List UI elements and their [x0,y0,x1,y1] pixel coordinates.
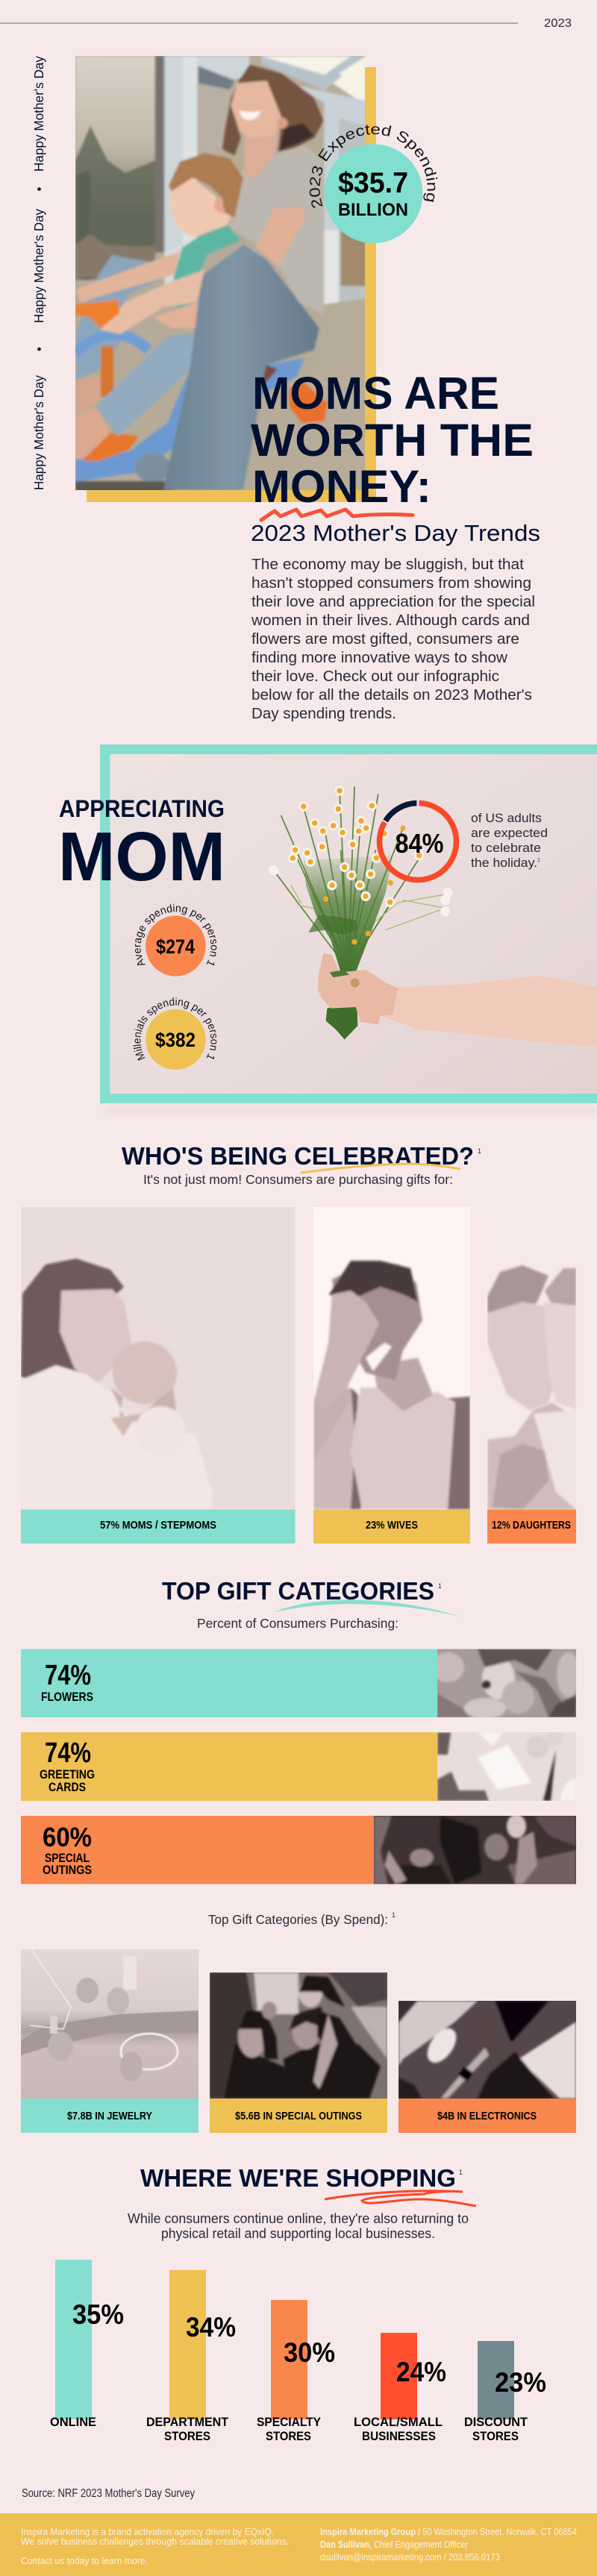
red squiggle under title [261,510,413,520]
bar chart: where we're shopping [50,2260,546,2443]
panel: appreciating mom photo frame [100,745,597,1115]
foot back [75,376,101,415]
yellow offset frame behind hero photo [87,67,376,502]
mother's hair [222,65,324,155]
local small businesses: 24% [396,2357,446,2387]
photo: electronics flat lay [398,2001,576,2099]
contact details: Inspira Marketing Group / 50 Washington Street, Norwalk, CT 06854 [320,2526,577,2537]
mother's shirt [230,145,324,315]
stat: average spending per person: Average spending per person 1 [134,904,216,965]
label bars under people photos: 57% MOMS / STEPMOMS [100,1520,216,1532]
arm [378,976,597,1047]
department stores [146,2270,236,2443]
online: 35% [72,2299,124,2330]
agency description: Inspira Marketing is a brand activation agency driven by EQxIQ. [21,2526,274,2537]
heading: appreciating mom: MOM [58,818,225,895]
value: 60% [43,1822,92,1852]
stat: millenials spending per person: $382 [155,1029,196,1051]
contact details [320,2526,577,2563]
front foot and pedal [75,407,110,460]
photo: family outdoors [210,1972,387,2099]
teal disc [324,144,422,243]
footer [0,2513,597,2576]
intro paragraph: finding more innovative ways to show [251,649,507,666]
boy's hair [169,153,243,218]
paragraph: where we're shopping: physical retail and supporting local businesses. [161,2225,435,2241]
blue seat [75,369,196,482]
donut chart: 84% [379,803,457,880]
discount stores: 23% [495,2367,546,2398]
online [50,2260,124,2429]
stat: average spending per person: $274 [156,936,195,958]
mother's neck and chest [245,131,278,179]
heading: top gift categories: TOP GIFT CATEGORIES [162,1578,434,1605]
vertical side text: Happy Mother's Day: Happy Mother's Day [31,56,46,172]
text: share of US adults: 1 [537,858,540,863]
text: share of US adults: of US adults [471,811,542,825]
source line: Source: NRF 2023 Mother's Day Survey [22,2487,195,2500]
spending circle: 2023 Expected Spending [309,125,437,208]
column: special outings [210,1972,387,2133]
bar: greeting cards: CARDS [49,1780,86,1794]
boy's shirt [174,225,241,311]
hero photo: mother and son on ride-on toy [75,56,366,492]
dense stems [304,856,393,972]
boy's back leg [76,255,160,380]
contact details: Dan Sullivan, Chief Engagement Officer [320,2539,469,2550]
main title: MOMS ARE [252,368,499,419]
column: jewelry [21,1949,199,2133]
BILLION: BILLION [338,200,408,220]
bar: flowers: FLOWERS [41,1690,93,1704]
spending circle [309,125,437,243]
text: share of US adults [471,811,548,870]
mother's jeans [163,245,319,490]
subheading: percent of consumers: Percent of Consumers Purchasing: [197,1616,398,1631]
intro paragraph: flowers are most gifted, consumers are [251,630,519,648]
daisy petals [274,791,448,912]
label bars under people photos [21,1510,576,1544]
department stores: DEPARTMENT [146,2415,229,2429]
specialty stores: STORES [266,2429,311,2443]
heading: appreciating mom: APPRECIATING [59,795,225,822]
column: electronics [398,2001,576,2133]
bar: greeting cards: GREETING [40,1767,95,1781]
online: ONLINE [50,2415,96,2429]
heading: who's being celebrated: 1 [478,1147,481,1155]
vertical side text: Happy Mother's Day: Happy Mother's Day [31,209,46,323]
discount stores: DISCOUNT [464,2415,528,2429]
teal brush stroke [274,1600,463,1617]
contact details: dsullivan@inspiramarketing.com / 203.856.0173 [320,2551,500,2563]
photo: daughters [487,1264,576,1510]
photo: roses [431,1649,581,1719]
subtitle: 2023 Mother's Day Trends [251,520,540,546]
label bars under people photos: 12% DAUGHTERS [492,1520,571,1532]
specialty stores [257,2300,335,2443]
daisy centres [293,791,419,942]
mother's face [231,81,282,138]
curved label: 2023 Expected Spending [319,134,427,207]
boy's forearm [153,302,198,328]
red brush stroke [325,2191,476,2206]
intro paragraph: The economy may be sluggish, but that [251,556,524,573]
value: 74% [45,1660,91,1691]
column: jewelry: $7.8B IN JEWELRY [67,2110,152,2122]
main title [251,368,534,513]
bar: special outings [21,1814,576,1884]
photo: hand holding chamomile bouquet [274,787,597,1047]
mother's front arm [75,251,180,302]
intro paragraph: hasn't stopped consumers from showing [251,574,531,592]
photo: greeting card flat lay [437,1729,576,1801]
stat: millenials spending per person: Millenials spending per person 1 [133,997,216,1061]
label bars under people photos: 23% WIVES [366,1520,418,1532]
heading: where we're shopping: 1 [459,2169,463,2176]
column: special outings: $5.6B IN SPECIAL OUTINGS [235,2110,362,2122]
specialty stores: SPECIALTY [257,2415,322,2429]
agency description: Contact us today to learn more. [21,2555,148,2566]
fist [318,953,398,1024]
bar: greeting cards [21,1729,576,1801]
discount stores [464,2341,546,2443]
wheel [135,453,171,483]
heading: where we're shopping: WHERE WE'RE SHOPPING [140,2165,456,2193]
intro paragraph: below for all the details on 2023 Mother's [251,686,532,703]
intro paragraph: women in their lives. Although cards and [251,612,530,629]
donut chart: 84%: 84% [396,828,443,859]
yellow brush stroke [301,1164,460,1173]
orange pole [101,346,113,397]
subheading: top gift categories by spend: 1 [392,1911,396,1919]
bar: flowers [21,1649,581,1719]
department stores: STORES [164,2429,210,2443]
bar: special outings: SPECIAL [45,1851,90,1865]
stems [274,787,418,970]
photo: mother kissing baby [21,1207,296,1510]
department stores: 34% [186,2312,236,2342]
local small businesses: BUSINESSES [362,2429,436,2443]
main title: MONEY: [252,461,431,513]
local small businesses [354,2333,446,2443]
discount stores: STORES [472,2429,519,2443]
subheading: top gift categories by spend: Top Gift Categories (By Spend): [208,1912,388,1927]
text: share of US adults: the holiday. [471,856,537,870]
specialty stores: 30% [284,2337,335,2368]
orange handlebar [75,300,119,328]
intro paragraph [251,556,535,722]
mother's arm [256,207,305,266]
text: share of US adults: are expected [471,826,548,840]
blue arch [75,334,149,354]
photo: woman laughing [313,1207,470,1510]
paragraph: where we're shopping: While consumers continue online, they're also returning to [128,2210,469,2226]
paragraph: where we're shopping [128,2210,469,2241]
heading: who's being celebrated: WHO'S BEING CELEBRATED? [122,1143,474,1171]
boy's front leg [96,333,194,436]
intro paragraph: their love. Check out our infographic [251,668,499,685]
photo: family hugging [374,1814,576,1884]
$35.7: $35.7 [338,167,408,199]
bar: special outings: OUTINGS [43,1863,92,1877]
text: share of US adults: to celebrate [471,841,541,855]
value: 74% [45,1737,91,1769]
agency description: We solve business challenges through scalable creative solutions. [21,2536,289,2547]
intro paragraph: their love and appreciation for the special [251,593,535,610]
orange toy part [290,383,328,423]
column: electronics: $4B IN ELECTRONICS [437,2110,537,2122]
photo: jewelry on sand [21,1949,199,2099]
main title: WORTH THE [251,415,534,466]
intro paragraph: Day spending trends. [251,705,396,722]
vertical side text: Happy Mother's Day [31,56,46,490]
heading: top gift categories: 1 [438,1582,442,1590]
vertical side text: Happy Mother's Day: Happy Mother's Day [31,375,46,490]
subheading: gifts for: It's not just mom! Consumers are purchasing gifts for: [143,1172,453,1187]
agency description [21,2526,289,2566]
boy's face [170,178,231,237]
top rule and year: 2023 [544,17,572,30]
local small businesses: LOCAL/SMALL [354,2415,443,2429]
